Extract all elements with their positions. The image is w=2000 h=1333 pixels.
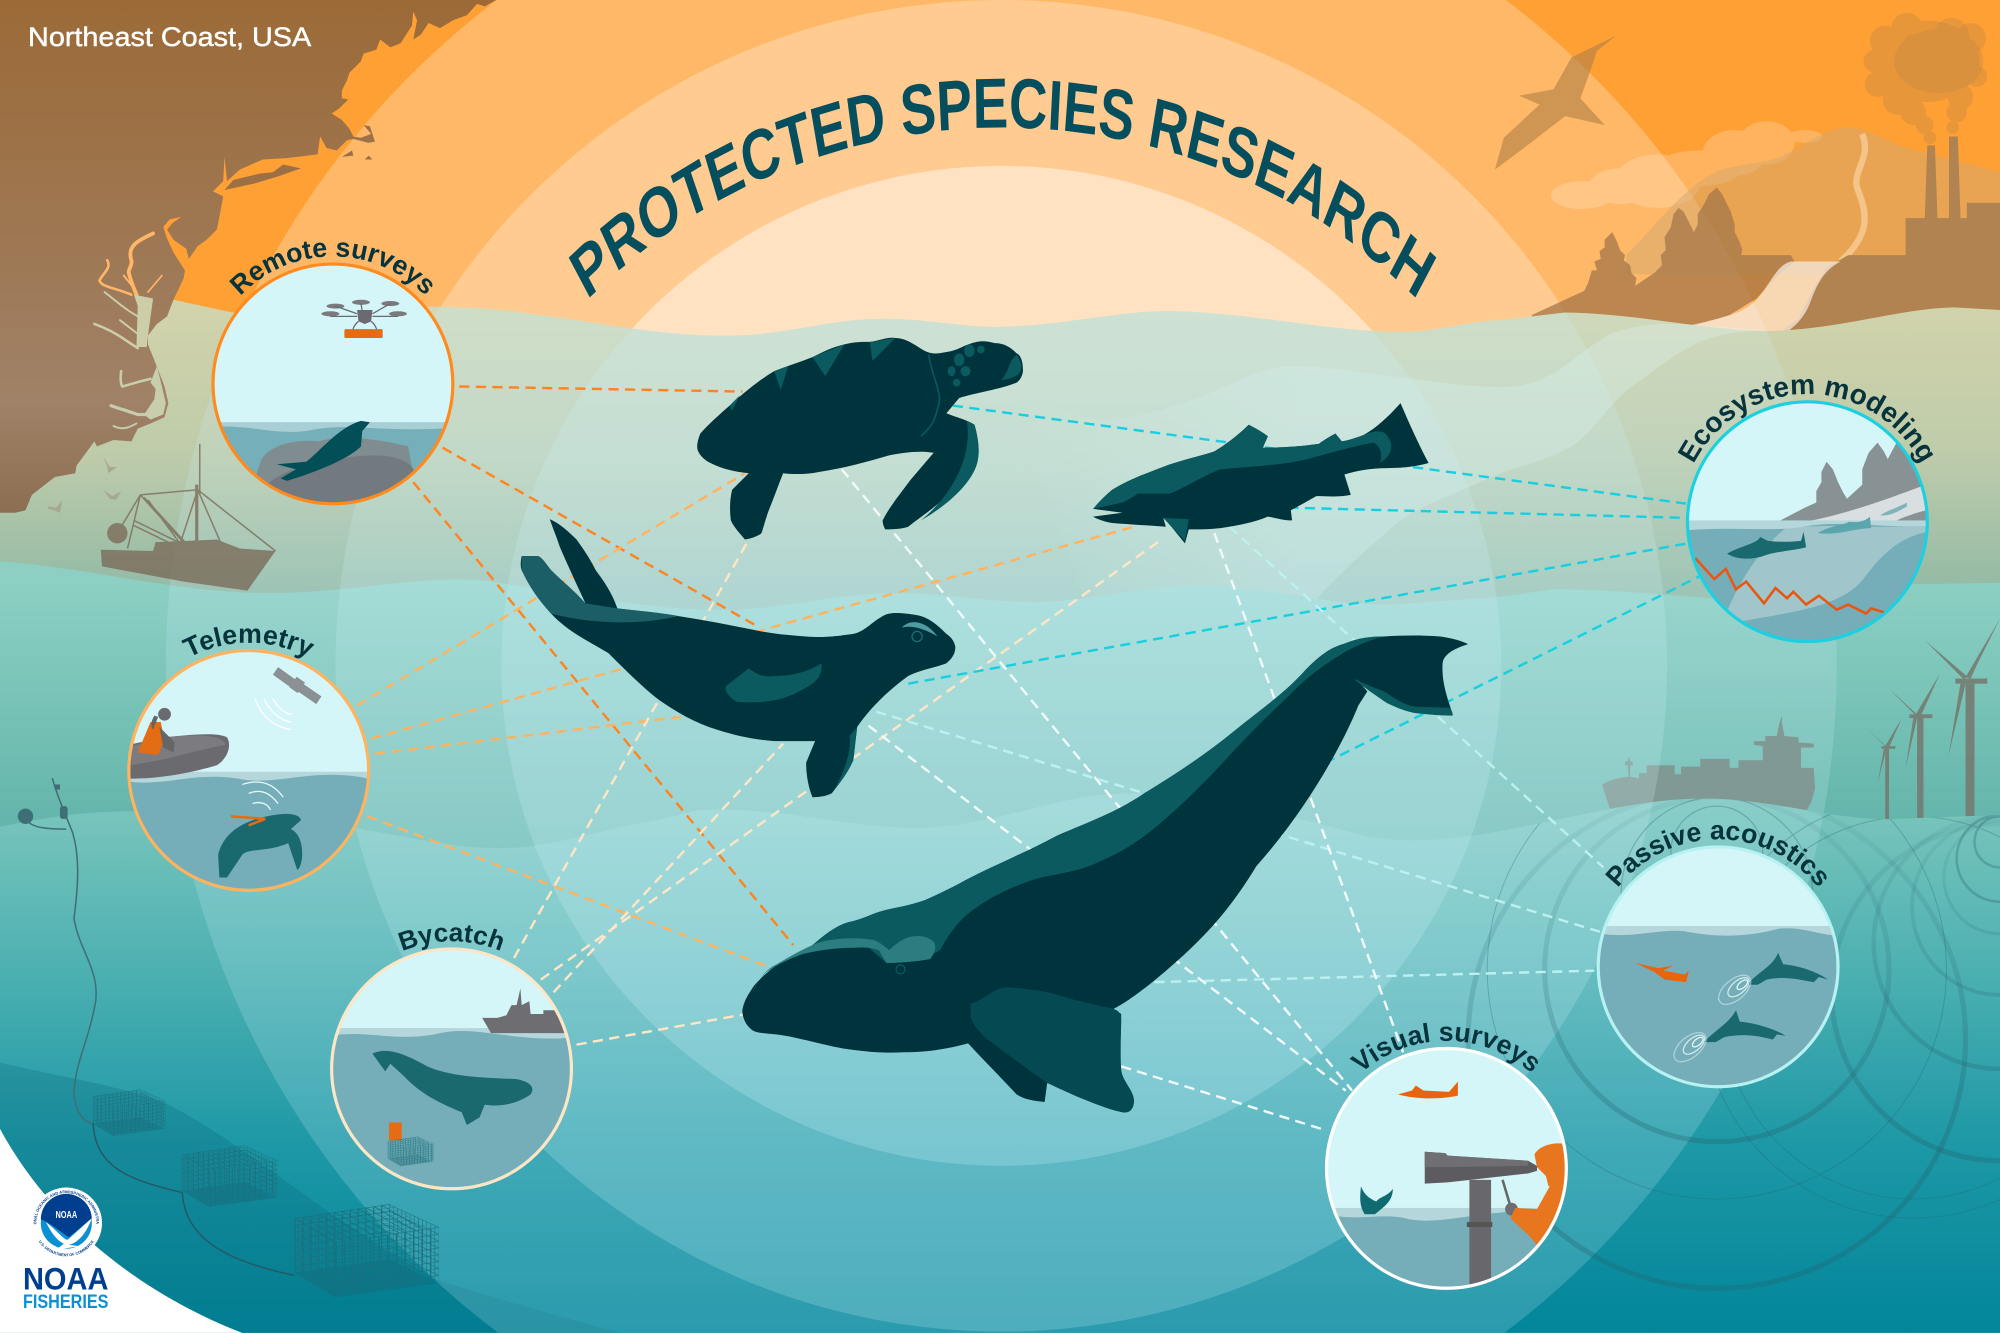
water layer 3 bbox=[0, 793, 2000, 1333]
seabed layer bbox=[0, 1063, 621, 1333]
fish trap 3 bbox=[295, 1204, 439, 1297]
logo: NOAA Fisheries bbox=[23, 1188, 108, 1313]
logo: NOAA Fisheries: FISHERIES bbox=[23, 1291, 108, 1313]
animal: seal bbox=[521, 519, 955, 797]
light swells in water layer 1 bbox=[1010, 324, 1783, 599]
logo: NOAA Fisheries: NOAA bbox=[23, 1261, 108, 1297]
bubble: telemetry bbox=[121, 651, 376, 893]
animal: right whale bbox=[742, 636, 1468, 1112]
label: ecosystem modeling: Ecosystem modeling bbox=[1678, 378, 1934, 464]
logo: NOAA Fisheries: NATIONAL OCEANIC AND ATMOSPHERIC ADMINISTRATION bbox=[34, 1190, 99, 1224]
water layer 1 bbox=[0, 296, 2000, 663]
label: visual surveys: Visual surveys bbox=[1350, 1022, 1538, 1071]
Long Island and nearby islands bbox=[224, 151, 372, 190]
location label: Northeast Coast, USA bbox=[28, 22, 311, 52]
illustration: smoke clouds, hill and bird bbox=[1495, 13, 2000, 274]
land: right shoreline with trees and factory bbox=[1532, 136, 2000, 338]
sound waves bbox=[1468, 740, 2000, 1288]
mooring line and buoys bbox=[18, 778, 295, 1276]
bubble: ecosystem modeling bbox=[1680, 402, 1939, 651]
bubble: remote surveys bbox=[211, 262, 454, 506]
fishing boat and gulls bbox=[47, 444, 276, 591]
label: passive acoustics: Passive acoustics bbox=[1605, 824, 1827, 887]
water concentric rings bbox=[166, 306, 1836, 1333]
dashed connections bbox=[357, 386, 1699, 1130]
white corner bbox=[0, 1129, 242, 1333]
bubble: visual surveys bbox=[1319, 1048, 1574, 1301]
wind turbines bbox=[1866, 619, 2000, 827]
land: northeast coast map bbox=[0, 0, 496, 513]
label: bycatch: Bycatch bbox=[398, 925, 503, 950]
fish trap 2 bbox=[182, 1145, 278, 1207]
bubble: passive acoustics bbox=[1591, 847, 1846, 1097]
label: telemetry: Telemetry bbox=[181, 626, 314, 658]
label: remote surveys: Remote surveys bbox=[229, 241, 432, 295]
cargo ship bbox=[1602, 716, 1815, 816]
bubble: bycatch bbox=[324, 949, 587, 1199]
drone bbox=[321, 300, 407, 338]
logo: NOAA Fisheries: U.S. DEPARTMENT OF COMMERCE bbox=[39, 1240, 94, 1256]
fish trap 1 bbox=[93, 1089, 165, 1136]
animal: sea turtle bbox=[697, 338, 1023, 540]
bays and estuaries bbox=[94, 233, 162, 428]
logo: NOAA Fisheries: NOAA bbox=[55, 1210, 78, 1221]
water layer 2 bbox=[0, 561, 2000, 867]
title: PROTECTED SPECIES RESEARCH bbox=[568, 78, 1436, 298]
animal: salmon bbox=[1093, 403, 1429, 543]
